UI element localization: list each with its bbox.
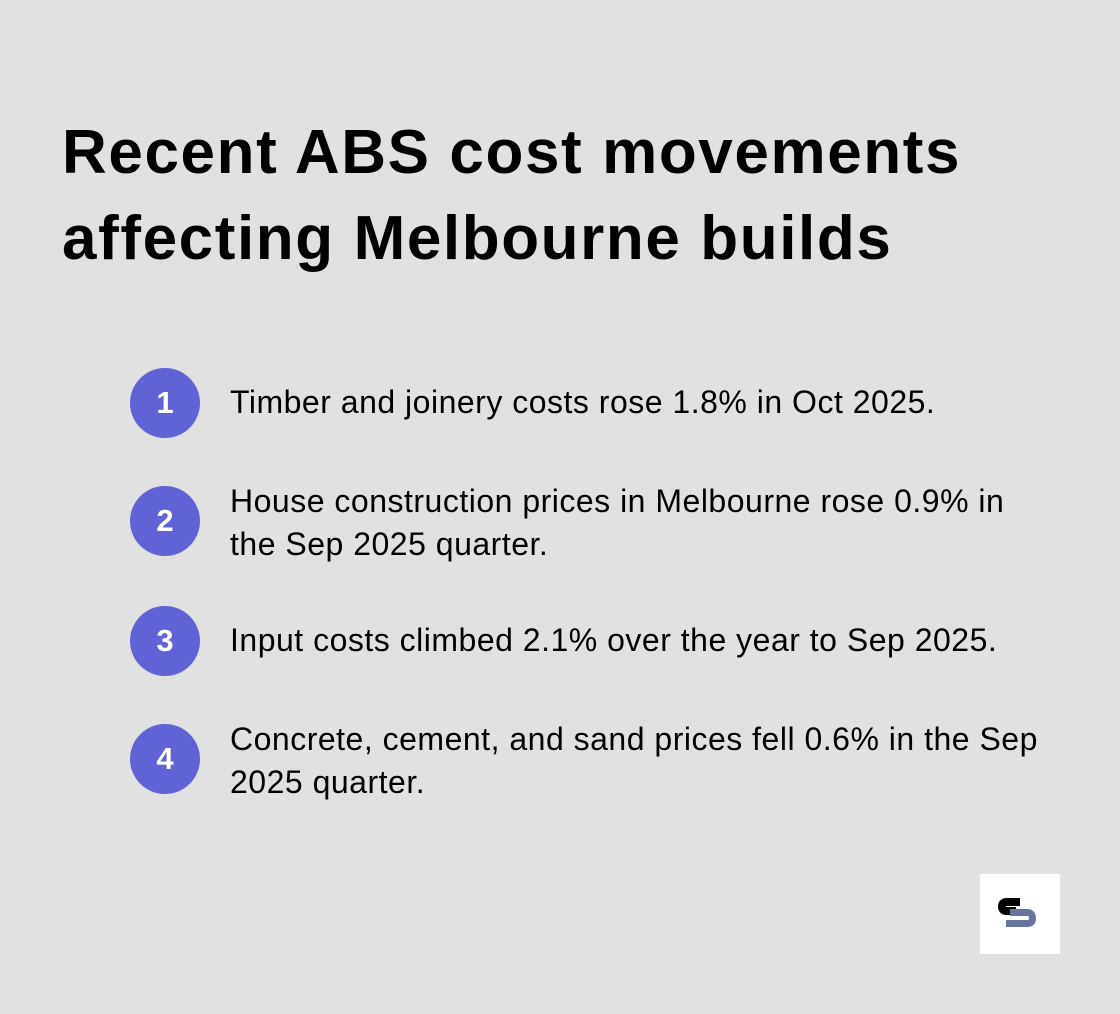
- title: Recent ABS cost movements: [62, 118, 961, 187]
- item 3: [130, 606, 997, 676]
- badge 1: [130, 368, 200, 438]
- text 3: Input costs climbed 2.1% over the year to Sep 2025.: [230, 622, 997, 658]
- item 4: [130, 721, 1038, 800]
- badge 1: 1: [156, 385, 174, 420]
- title: affecting Melbourne builds: [62, 204, 892, 273]
- item 1: [130, 368, 935, 438]
- text 4: 2025 quarter.: [230, 764, 425, 800]
- badge 2: 2: [156, 503, 174, 538]
- text 4: Concrete, cement, and sand prices fell 0.6% in the Sep: [230, 721, 1038, 757]
- text 2: [230, 483, 1004, 562]
- logo: [980, 874, 1060, 954]
- badge 3: 3: [156, 623, 174, 658]
- item 2: [130, 483, 1004, 562]
- badge 4: 4: [156, 741, 174, 776]
- badge 2: [130, 486, 200, 556]
- text 4: [230, 721, 1038, 800]
- text 2: House construction prices in Melbourne rose 0.9% in: [230, 483, 1004, 519]
- text 2: the Sep 2025 quarter.: [230, 526, 548, 562]
- badge 4: [130, 724, 200, 794]
- text 1: Timber and joinery costs rose 1.8% in Oct 2025.: [230, 384, 935, 420]
- badge 3: [130, 606, 200, 676]
- title: [62, 118, 961, 273]
